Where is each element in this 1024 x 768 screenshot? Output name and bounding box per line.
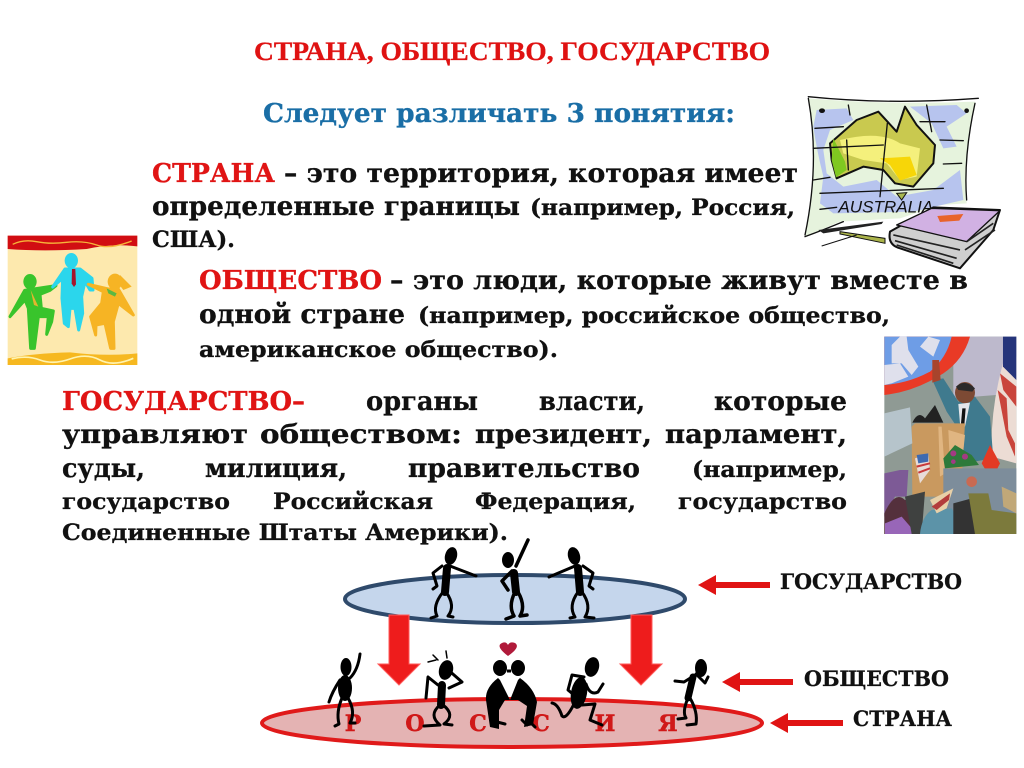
text block: society definition: (например, российское общество, [418, 303, 890, 329]
top ellipse: state [345, 575, 685, 623]
label: society: ОБЩЕСТВО [804, 666, 949, 691]
letters: Russia: Я [658, 711, 678, 737]
text block: state definition: обществом: [260, 420, 462, 450]
letters: Russia: Р [345, 711, 361, 737]
icon: heart [500, 642, 517, 656]
title: СТРАНА, ОБЩЕСТВО, ГОСУДАРСТВО [254, 37, 770, 66]
text block: state definition: Российская [273, 489, 433, 515]
text block: state definition: власти, [539, 387, 645, 417]
text block: state definition: ГОСУДАРСТВО– [62, 387, 305, 417]
arrow: to society label [722, 672, 793, 692]
icon: map of Australia with book [805, 97, 1000, 268]
stick figures on the state ellipse [431, 540, 594, 619]
icon: map of Australia with book: AUSTRALIA [837, 198, 933, 217]
letters: Russia [345, 711, 678, 737]
text block: state definition [62, 387, 847, 546]
subtitle: Следует различать 3 понятия: [263, 99, 735, 129]
text block: state definition: парламент, [665, 420, 847, 450]
stick figures on the country ellipse [329, 642, 708, 729]
icon: politician speaking at a rally [884, 337, 1016, 534]
text block: state definition: органы [366, 387, 478, 417]
text block: state definition: Федерация, [475, 489, 636, 515]
text block: state definition: президент, [475, 420, 652, 450]
text block: state definition: суды, [62, 454, 145, 484]
bottom ellipse: country [262, 699, 762, 747]
arrow: to state label [698, 575, 770, 595]
label: country: СТРАНА [853, 706, 952, 731]
text block: society definition: ОБЩЕСТВО [199, 266, 382, 296]
text block: state definition: которые [714, 387, 847, 417]
text block: state definition: государство [62, 489, 230, 515]
letters: Russia: С [469, 711, 487, 737]
text block: country definition: определенные границы [152, 192, 520, 222]
arrow: right down [620, 615, 662, 685]
letters: Russia: С [532, 711, 550, 737]
text block: society definition: – это люди, которые живут вместе в [390, 266, 968, 296]
text block: country definition [152, 159, 798, 253]
letters: Russia: И [595, 711, 615, 737]
arrow: to country label [770, 713, 843, 733]
letters: Russia: О [405, 711, 425, 737]
text block: state definition: (например, [692, 457, 847, 483]
text block: society definition: одной стране [199, 300, 405, 330]
text block: state definition: правительство [408, 454, 640, 484]
text block: country definition: (например, Россия, [530, 195, 795, 221]
label: state: ГОСУДАРСТВО [780, 569, 962, 594]
icon: three dancing people [8, 236, 137, 365]
text block: society definition: американское общество). [199, 337, 558, 363]
text block: country definition: США). [152, 227, 235, 253]
text block: state definition: милиция, [205, 454, 347, 484]
text block: country definition: – это территория, которая имеет [284, 159, 798, 189]
arrow: left down [378, 615, 420, 685]
text block: state definition: Соединенные Штаты Америки). [62, 520, 508, 546]
text block: state definition: управляют [62, 420, 248, 450]
text block: state definition: государство [678, 489, 847, 515]
text block: society definition [199, 266, 968, 363]
text block: country definition: СТРАНА [152, 159, 275, 189]
